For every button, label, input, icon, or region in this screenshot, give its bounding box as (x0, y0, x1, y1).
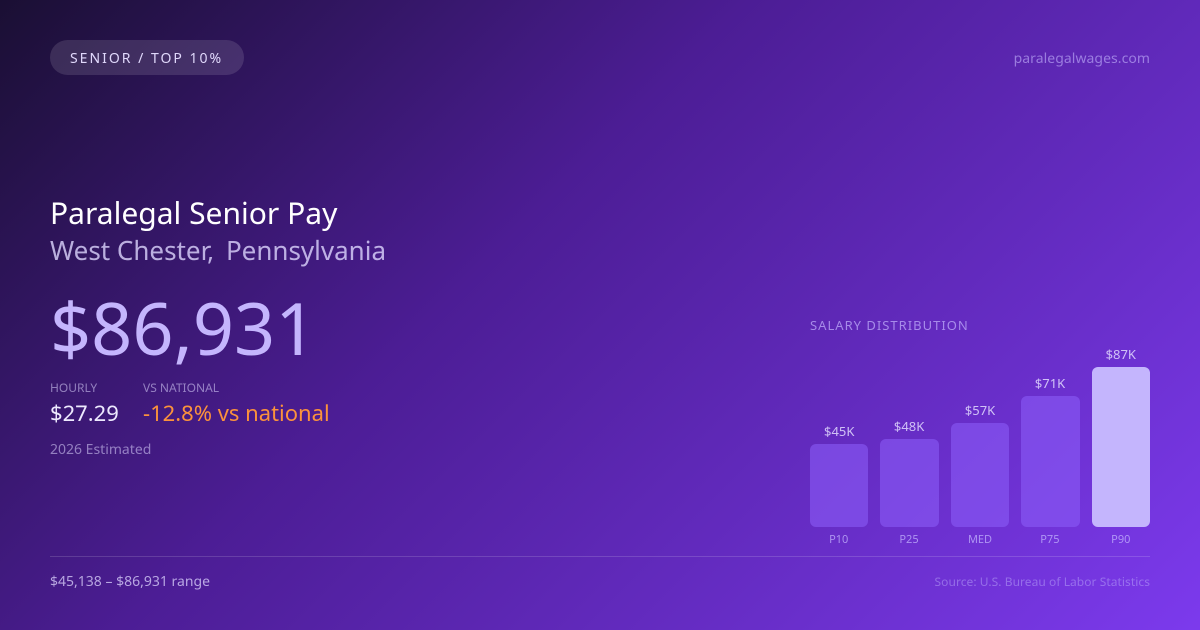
bar P25 (880, 439, 939, 527)
label P75: P75 (1040, 532, 1060, 547)
location: West Chester, Pennsylvania (50, 232, 386, 268)
badge: senior / top 10% (50, 40, 244, 75)
label P90: P90 (1111, 532, 1130, 547)
source: Source: U.S. Bureau of Labor Statistics (935, 573, 1150, 590)
stat: vs national: -12.8% vs national (143, 398, 330, 428)
stat: hourly (50, 379, 119, 428)
bar P10 (810, 444, 868, 527)
badge: senior / top 10%: SENIOR / TOP 10% (70, 49, 223, 68)
year note: 2026 Estimated (50, 440, 151, 459)
label MED: MED (968, 532, 992, 547)
title: Paralegal Senior Pay (50, 192, 337, 233)
label P25: P25 (899, 532, 919, 547)
stat: vs national: VS NATIONAL (143, 379, 219, 396)
salary range: $45,138 – $86,931 range (50, 572, 210, 591)
chart heading: SALARY DISTRIBUTION (810, 316, 969, 334)
bar P75 (1021, 396, 1080, 527)
value P90: $87K (1106, 345, 1136, 363)
stat: hourly: HOURLY (50, 379, 97, 396)
chart: salary distribution (810, 316, 1150, 547)
value P75: $71K (1035, 374, 1065, 392)
main salary: $86,931 (50, 279, 316, 377)
stat: vs national (143, 379, 330, 428)
stat: hourly: $27.29 (50, 398, 119, 428)
value P10: $45K (824, 422, 854, 440)
site name: paralegalwages.com (1014, 49, 1150, 68)
value MED: $57K (965, 401, 995, 419)
bar P90 (1092, 367, 1150, 527)
value P25: $48K (894, 417, 924, 435)
label P10: P10 (829, 532, 848, 547)
bar MED (951, 423, 1009, 527)
